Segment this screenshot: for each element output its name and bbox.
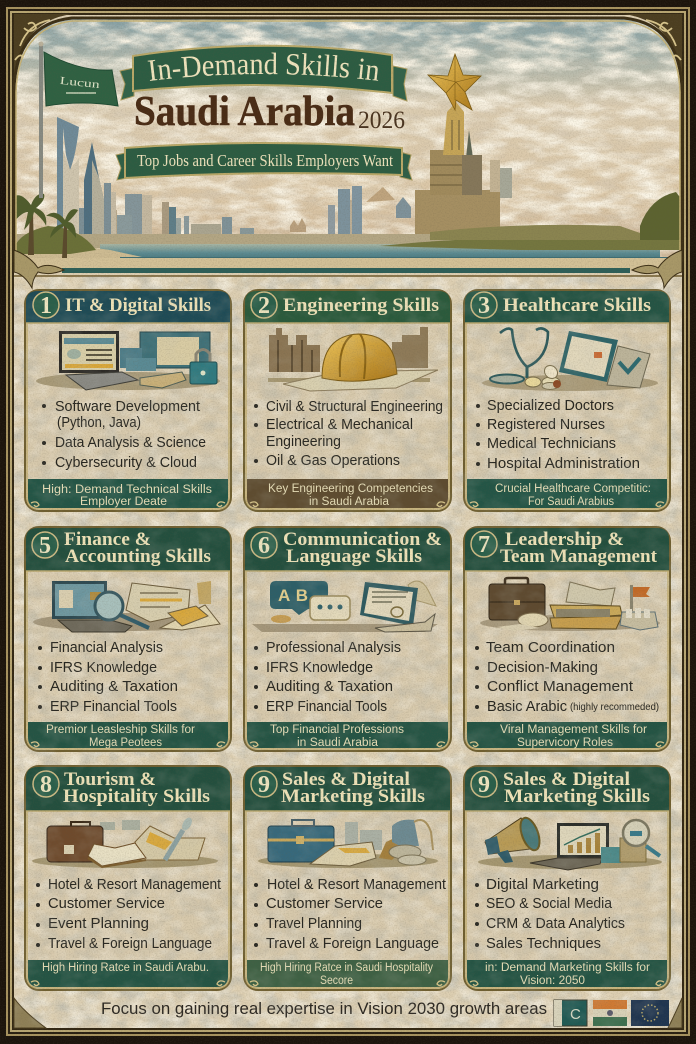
icon: briefcase, books and flag xyxy=(480,578,660,631)
panel: Engineering Skills xyxy=(244,290,451,511)
footer note: High Hiring Ratce in Saudi Arabu. xyxy=(42,962,209,974)
bullet list: IFRS Knowledge xyxy=(50,660,157,676)
heading: Finance & xyxy=(64,529,151,550)
arch frame xyxy=(14,14,682,288)
heading: Language Skills xyxy=(286,546,422,567)
footer note: Supervicory Roles xyxy=(517,737,613,749)
bullet list: Travel & Foreign Language xyxy=(48,936,212,952)
bullet list xyxy=(38,640,178,715)
bullet list: Customer Service xyxy=(48,896,165,912)
bullet list xyxy=(254,640,401,715)
panel: Sales & Digital Marketing Skills (right) xyxy=(464,766,670,990)
footer note: High Hiring Ratce in Saudi Hospitality xyxy=(260,962,433,974)
heading: 1 xyxy=(40,293,52,319)
bullet list: Civil & Structural Engineering xyxy=(266,399,443,415)
heading: Sales & Digital xyxy=(503,769,630,790)
panel: Finance & Accounting Skills xyxy=(25,527,231,751)
heading xyxy=(251,529,442,567)
flags row: C xyxy=(570,1006,581,1023)
footer note xyxy=(270,724,404,749)
footer note: Secore xyxy=(320,975,353,987)
heading: Marketing Skills xyxy=(281,786,425,807)
bullet list: Hotel & Resort Management xyxy=(48,877,221,893)
heading: 6 xyxy=(258,533,270,559)
footer note: Crucial Healthcare Competitic: xyxy=(495,483,651,495)
title: Saudi Arabia 2026: 2026 xyxy=(358,107,405,134)
footer note: Top Financial Professions xyxy=(270,724,404,736)
footer note: Viral Management Skills for xyxy=(500,724,647,736)
bullet list: Travel Planning xyxy=(266,916,362,932)
bullet list: Digital Marketing xyxy=(486,877,599,893)
bullet list: Oil & Gas Operations xyxy=(266,453,400,469)
icon: speech bubbles, tablet and notepad xyxy=(252,581,438,632)
bullet list xyxy=(42,399,206,471)
water and shore xyxy=(16,224,680,258)
heading xyxy=(33,769,210,807)
bullet list xyxy=(254,399,443,469)
panel: IT & Digital Skills xyxy=(25,290,231,511)
footer note: For Saudi Arabius xyxy=(528,496,614,508)
footer note xyxy=(42,484,212,508)
flags row xyxy=(554,1000,669,1026)
bullet list: Event Planning xyxy=(48,916,149,932)
bullet list: Electrical & Mechanical xyxy=(266,417,413,433)
footer note: Premior Leasleship Skills for xyxy=(46,724,195,736)
bullet list: Specialized Doctors xyxy=(487,398,614,414)
bullet list: Conflict Management xyxy=(487,679,633,695)
footer note: in Saudi Arabia xyxy=(297,737,379,749)
heading: Communication & xyxy=(283,529,442,550)
panel: Sales & Digital Marketing Skills (centre) xyxy=(244,766,451,990)
heading: IT & Digital Skills xyxy=(65,295,211,316)
footer note xyxy=(268,483,433,508)
bullet list: SEO & Social Media xyxy=(486,896,613,912)
icon: hard hat with factories and blueprint xyxy=(268,327,438,391)
icon: flag pole and Saudi flag: Lucun xyxy=(59,75,101,91)
heading xyxy=(471,292,651,319)
bullet list: Basic Arabic xyxy=(487,699,567,715)
panel: Healthcare Skills xyxy=(464,290,670,511)
footer note xyxy=(485,962,650,987)
icon: right skyline and tower xyxy=(290,102,512,237)
icon: megaphone, laptop chart and magnifier xyxy=(478,815,662,870)
bullet list: Hotel & Resort Management xyxy=(267,877,446,893)
bullet list: Professional Analysis xyxy=(266,640,401,656)
heading: Tourism & xyxy=(64,769,156,790)
heading: 3 xyxy=(478,293,490,319)
bullet list xyxy=(254,877,446,952)
footer note: in Saudi Arabia xyxy=(309,496,390,508)
bullet list: ERP Financial Tools xyxy=(266,699,387,715)
heading: Hospitality Skills xyxy=(63,786,210,807)
hero panel: skyline illustration xyxy=(12,14,682,288)
heading xyxy=(471,769,650,807)
icon: golden star on tower xyxy=(428,54,481,110)
bullet list: IFRS Knowledge xyxy=(266,660,373,676)
title: Saudi Arabia 2026: Saudi Arabia xyxy=(134,89,355,135)
footer note: Key Engineering Competencies xyxy=(268,483,433,495)
heading: Accounting Skills xyxy=(65,546,211,567)
footer note xyxy=(500,724,647,749)
bullet list: Data Analysis & Science xyxy=(55,435,206,451)
icon: laptop, magnifier and financial documents xyxy=(33,581,220,632)
icon: laptop, screens and padlock xyxy=(36,331,220,390)
footer note: in: Demand Marketing Skills for xyxy=(485,962,650,974)
heading: Engineering Skills xyxy=(283,295,439,316)
heading: 2 xyxy=(258,293,270,319)
icon: blue briefcase, skyline, papers and gear xyxy=(258,820,438,868)
bullet list: CRM & Data Analytics xyxy=(486,916,625,932)
bullet list: Registered Nurses xyxy=(487,417,605,433)
bullet list: Team Coordination xyxy=(486,640,615,656)
heading: Sales & Digital xyxy=(282,769,410,790)
bullet list: Cybersecurity & Cloud xyxy=(55,455,197,471)
icon: stethoscope, tablet, pills, clipboard xyxy=(482,328,658,391)
heading xyxy=(33,292,211,319)
bullet list: (highly recommeded) xyxy=(570,701,659,713)
bullet list: Auditing & Taxation xyxy=(50,679,178,695)
bullet list: Auditing & Taxation xyxy=(266,679,393,695)
icon: flag pole and Saudi flag xyxy=(38,42,118,198)
bullet list: (Python, Java) xyxy=(57,415,141,431)
footer note: Mega Peotees xyxy=(89,737,162,749)
footer note: Vision: 2050 xyxy=(520,975,585,987)
footer note: High: Demand Technical Skills xyxy=(42,484,212,496)
heading: Marketing Skills xyxy=(504,786,650,807)
bullet list xyxy=(475,877,625,952)
bullet list: Travel & Foreign Language xyxy=(266,936,439,952)
bullet list xyxy=(476,398,640,472)
bottom corner ornaments xyxy=(14,998,682,1028)
heading xyxy=(471,529,658,567)
bullet list: Hospital Administration xyxy=(487,456,640,472)
heading: 8 xyxy=(40,772,52,798)
title banner: In-Demand Skills in xyxy=(119,44,408,102)
bullet list xyxy=(36,877,221,952)
bullet list: Decision-Making xyxy=(487,660,598,676)
bullet list: Medical Technicians xyxy=(487,436,616,452)
heading: 5 xyxy=(39,533,51,559)
icon: speech bubbles, tablet and notepad: AB xyxy=(278,586,308,605)
heading: Leadership & xyxy=(505,529,624,550)
bullet list xyxy=(475,640,659,715)
closing message: Focus on gaining real expertise in Vision 2030 growth areas xyxy=(101,999,547,1018)
panel: Leadership & Team Management xyxy=(464,527,670,751)
footer note: Employer Deate xyxy=(80,496,167,508)
bullet list: Software Development xyxy=(55,399,200,415)
heading: Team Management xyxy=(500,546,658,567)
bullet list: Customer Service xyxy=(266,896,383,912)
icon: left skyline buildings xyxy=(57,117,254,240)
panel: Communication & Language Skills xyxy=(244,527,451,751)
subtitle banner xyxy=(116,143,412,180)
footer note xyxy=(46,724,195,749)
title banner: In-Demand Skills in: In-Demand Skills in xyxy=(148,52,378,81)
icon: suitcase, open book, map and spoon xyxy=(32,816,218,868)
bullet list: Engineering xyxy=(266,434,341,450)
heading xyxy=(32,529,211,567)
heading: 7 xyxy=(478,532,490,558)
heading: Healthcare Skills xyxy=(503,295,651,316)
footer note xyxy=(495,483,651,508)
panel: Tourism & Hospitality Skills xyxy=(25,766,231,990)
bullet list: Sales Techniques xyxy=(486,936,601,952)
icon: palm trees xyxy=(12,192,682,258)
bullet list: ERP Financial Tools xyxy=(50,699,177,715)
heading: 9 xyxy=(478,772,490,798)
bullet list: Financial Analysis xyxy=(50,640,163,656)
heading xyxy=(251,292,439,319)
subtitle banner: Top Jobs and Career Skills Employers Want xyxy=(137,151,393,170)
footer note xyxy=(260,962,433,987)
heading xyxy=(251,769,425,807)
heading: 9 xyxy=(258,772,270,798)
